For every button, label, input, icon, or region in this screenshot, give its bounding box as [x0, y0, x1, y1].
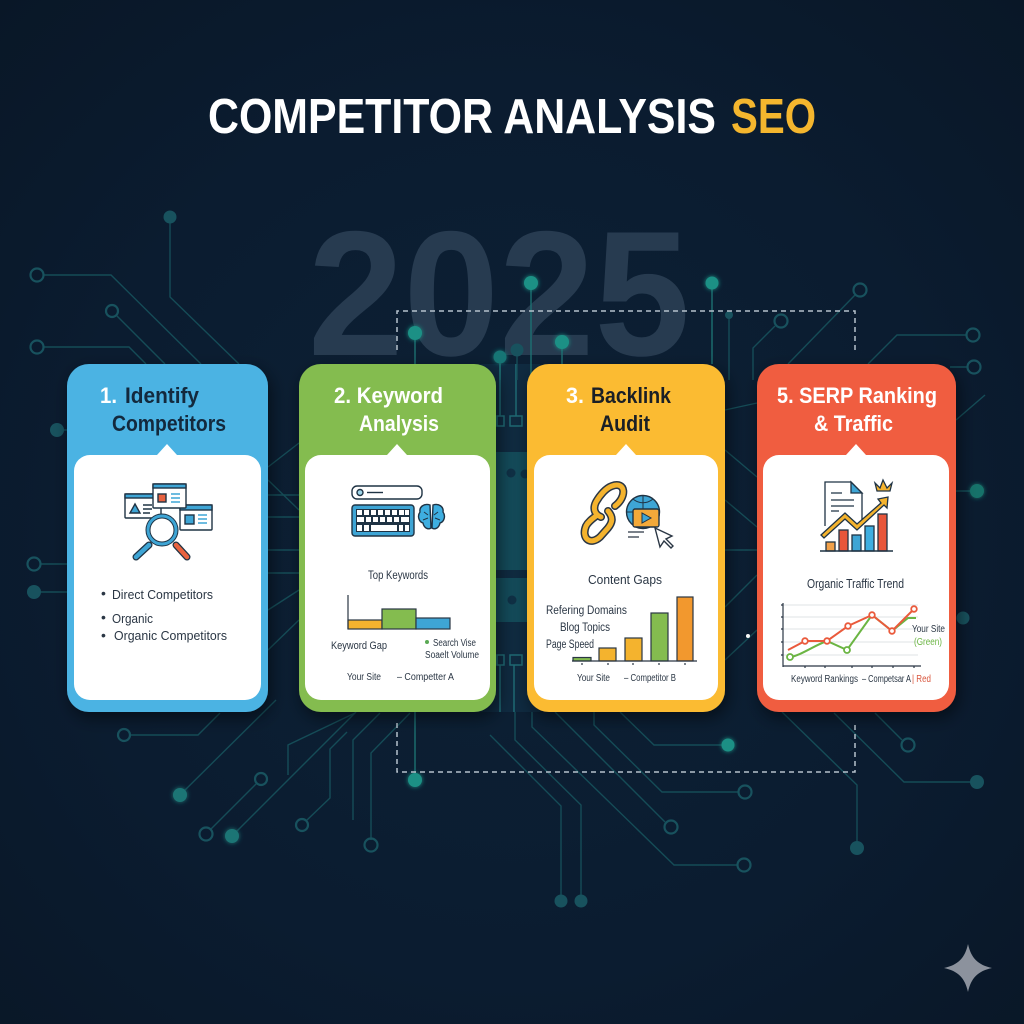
chart legend: Your Site: [577, 673, 610, 684]
panel: serp ranking and traffic: [757, 364, 956, 712]
white content box: [534, 444, 718, 700]
icon: chain link, globe, video and cursor: [585, 485, 673, 548]
heading: Analysis: [359, 411, 439, 436]
heading: Backlink: [591, 383, 672, 408]
chart labels: Keyword Rankings: [791, 674, 858, 685]
heading: Identify: [125, 383, 200, 408]
label: Organic Traffic Trend: [807, 577, 904, 591]
dashed frame: [397, 311, 855, 772]
chart side labels: Page Speed: [546, 639, 594, 651]
bullet list: •: [101, 627, 106, 643]
bullet list: Organic Competitors: [114, 629, 227, 643]
chart labels: Your Site: [347, 672, 381, 683]
circuit lines: [34, 217, 985, 901]
chart legend: [577, 673, 676, 684]
title: SEO: [731, 90, 816, 144]
circuit nodes: [27, 210, 984, 908]
bullet list: Direct Competitors: [112, 588, 213, 602]
white content box: [305, 444, 490, 700]
heading: & Traffic: [814, 411, 893, 436]
chart side labels: Blog Topics: [560, 622, 610, 634]
chart side labels: Refering Domains: [546, 605, 627, 617]
heading: Competitors: [112, 411, 226, 436]
chart labels: – Competsar A: [862, 674, 911, 685]
title: COMPETITOR ANALYSIS: [208, 90, 716, 144]
panel: identify competitors: [67, 364, 268, 712]
chart legend: – Competitor B: [624, 673, 676, 684]
chart side labels: [546, 605, 627, 651]
chart labels: | Red: [912, 674, 931, 685]
white content box: [74, 444, 261, 700]
chart labels: [331, 638, 479, 683]
bullet list: [101, 585, 227, 643]
label: Top Keywords: [368, 570, 428, 582]
heading: 2. Keyword: [334, 383, 443, 408]
heading: [100, 383, 226, 436]
heading: 5. SERP Ranking: [777, 383, 937, 408]
chart labels: Keyword Gap: [331, 640, 387, 652]
label: Content Gaps: [588, 572, 662, 587]
bar chart: keyword gap: [348, 595, 450, 629]
heading: [566, 383, 672, 436]
line chart: organic traffic: [781, 603, 921, 668]
bullet list: •: [101, 609, 106, 625]
icon: document, growth arrow, bars and crown: [820, 480, 893, 551]
heading: Audit: [600, 411, 651, 436]
chart labels: (Green): [914, 637, 942, 648]
heading: 1.: [100, 383, 117, 408]
heading: [777, 383, 937, 436]
heading: [334, 383, 443, 436]
panel: keyword analysis: [299, 364, 496, 712]
panel: backlink audit: [527, 364, 725, 712]
chart labels: [791, 624, 945, 685]
watermark year 2025: 2025: [308, 194, 690, 393]
icon: browser windows and magnifier: [125, 484, 212, 557]
chart labels: Search Vise: [433, 638, 476, 649]
chart labels: Soaelt Volume: [425, 650, 479, 661]
icon: search bar, keyboard and brain: [352, 486, 444, 536]
central chip behind cards: [480, 364, 540, 712]
bullet list: Organic: [112, 612, 153, 626]
bar chart: content gaps: [572, 597, 697, 665]
white content box: [763, 444, 949, 700]
icon: sparkle: [944, 944, 992, 992]
bullet list: •: [101, 585, 106, 601]
chart labels: Your Site: [912, 624, 945, 635]
chart labels: – Competter A: [397, 672, 454, 683]
heading: 3.: [566, 383, 584, 408]
